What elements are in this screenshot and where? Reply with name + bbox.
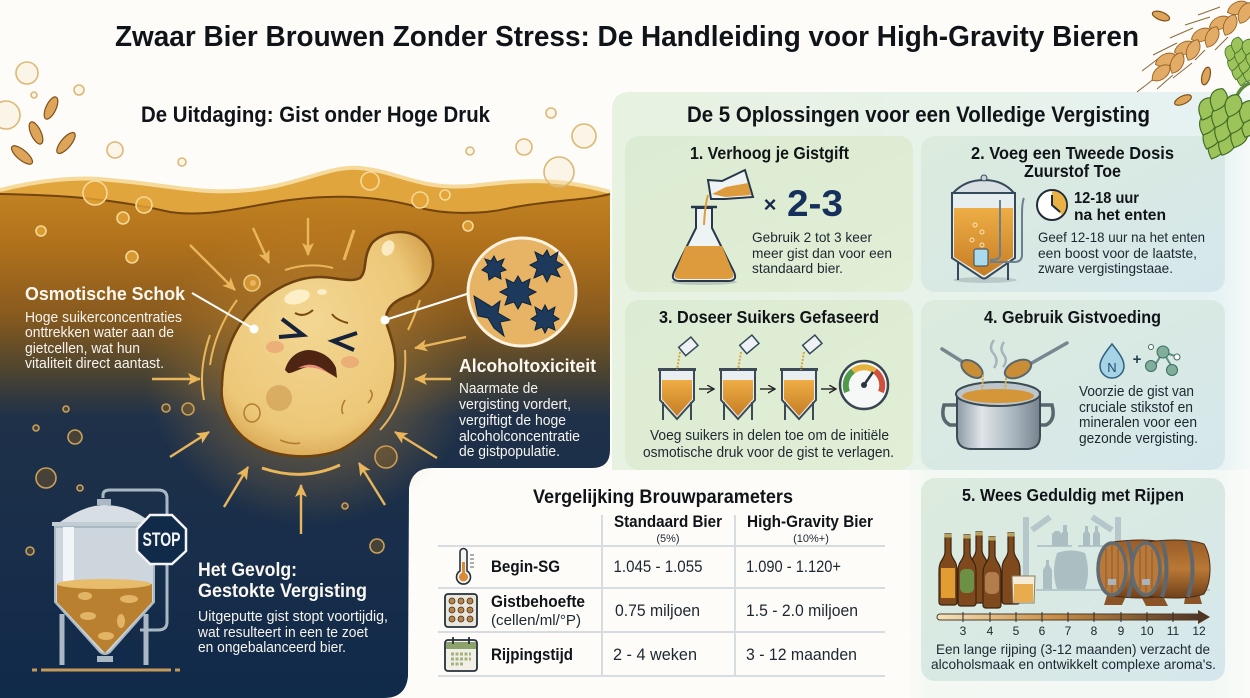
icon: three dosing tanks (658, 335, 835, 420)
card 3: suikers: Voeg suikers in delen toe om de initiële (650, 428, 889, 444)
timeline arrow (937, 610, 1210, 638)
text: osmotische schok (25, 283, 186, 372)
text: alcoholtoxiciteit: vergiftigt de hoge (459, 413, 566, 429)
card 4: gistvoeding: 4. Gebruik Gistvoeding (984, 307, 1161, 327)
card 2: zuurstof: 12-18 uur (1074, 190, 1139, 207)
row: rijpingstijd: Rijpingstijd (491, 646, 573, 664)
text: osmotische schok: Osmotische Schok (25, 283, 186, 304)
icon: barrels (1098, 540, 1210, 606)
text: het gevolg: Gestokte Vergisting (198, 580, 367, 602)
stop sign (137, 515, 186, 564)
timeline arrow: 12 (1192, 624, 1206, 638)
card 3: suikers: 3. Doseer Suikers Gefaseerd (659, 307, 879, 327)
text: alcoholtoxiciteit: Naarmate de (459, 381, 538, 397)
pressure arrows (152, 218, 466, 534)
text: alcoholtoxiciteit: de gistpopulatie. (459, 444, 560, 460)
comparison table (438, 486, 885, 676)
icon: oxygenated tank (952, 175, 1024, 283)
row: gistbehoefte: (cellen/ml/°P) (491, 613, 581, 629)
barley seeds (9, 95, 78, 167)
row: gistbehoefte: 0.75 miljoen (615, 602, 700, 620)
section heading: De Uitdaging: Gist onder Hoge Druk (141, 102, 491, 127)
table header: (10%+) (793, 533, 829, 545)
icon: well plate (445, 594, 477, 627)
timeline arrow: 4 (987, 624, 994, 638)
text: alcoholtoxiciteit (459, 355, 596, 460)
card 5: rijpen (921, 478, 1225, 681)
row: gistbehoefte (445, 593, 858, 629)
row: gistbehoefte: Gistbehoefte (491, 593, 585, 611)
card 1: gistgift: 2-3 (787, 183, 843, 224)
section heading: De 5 Oplossingen voor een Volledige Vergisting (687, 102, 1150, 127)
text: alcoholtoxiciteit: alcoholconcentratie (459, 429, 580, 445)
icon: calendar (445, 637, 477, 671)
bubbles (0, 62, 596, 555)
decoration: wheat ear (1137, 0, 1250, 92)
icon: pressure gauge (840, 361, 888, 409)
timeline arrow: 11 (1167, 624, 1180, 638)
text: osmotische schok: vitaliteit direct aantast. (25, 356, 164, 372)
timeline arrow: 10 (1140, 624, 1154, 638)
card 1: gistgift (625, 136, 913, 292)
comparison table: Vergelijking Brouwparameters (533, 486, 793, 508)
timeline arrow: 7 (1065, 624, 1072, 638)
row: rijpingstijd (445, 637, 857, 671)
panel background (612, 92, 1250, 698)
magnifier: alcohol toxicity (468, 238, 576, 346)
row: rijpingstijd: 3 - 12 maanden (746, 646, 857, 664)
panel: de uitdaging (0, 62, 610, 698)
card 4: gistvoeding: gezonde vergisting. (1079, 431, 1198, 447)
card 3: suikers: osmotische druk voor de gist te verlagen. (643, 445, 894, 461)
card 5: rijpen: alcoholsmaak en ontwikkelt complexe aroma's. (931, 656, 1216, 672)
timeline arrow: 9 (1118, 624, 1125, 638)
card 1: gistgift: × (764, 192, 776, 217)
icon: clock (1037, 190, 1067, 220)
callout lines (192, 293, 470, 334)
row: begin-sg: Begin-SG (491, 558, 560, 576)
decoration: falling grains (1151, 9, 1212, 107)
card 5: rijpen: Een lange rijping (3-12 maanden) verzacht de (936, 641, 1210, 657)
timeline arrow: 6 (1039, 624, 1046, 638)
card 2: zuurstof: Geef 12-18 uur na het enten (1038, 229, 1205, 245)
decoration: hop cones (1182, 35, 1250, 171)
stop sign: STOP (142, 530, 181, 551)
card 2: zuurstof (921, 136, 1225, 292)
glow behind yeast (145, 215, 475, 525)
icon: nitrogen and minerals: + (1133, 351, 1142, 368)
card 2: zuurstof: 2. Voeg een Tweede Dosis (971, 143, 1174, 163)
icon: pot and spoons (942, 340, 1067, 449)
icon: bottles and glass (939, 532, 1035, 608)
card 2: zuurstof: een boost voor de laatste, (1038, 245, 1197, 261)
icon: stalled fermenter (32, 490, 186, 670)
beer background (0, 168, 610, 698)
text: alcoholtoxiciteit: Alcoholtoxiciteit (459, 355, 596, 376)
icon: flask and pouring beaker (671, 170, 753, 285)
row: gistbehoefte: 1.5 - 2.0 miljoen (746, 602, 858, 620)
row: begin-sg: 1.045 - 1.055 (614, 558, 702, 576)
icon: nitrogen and minerals: N (1107, 360, 1117, 375)
timeline arrow: 3 (960, 624, 967, 638)
table header (614, 513, 874, 545)
icon: thermometer (456, 548, 474, 584)
text: het gevolg: Uitgeputte gist stopt voortijdig, (198, 609, 388, 625)
timeline arrow: 5 (1013, 624, 1020, 638)
card 2: zuurstof: na het enten (1074, 207, 1166, 224)
text: osmotische schok: Hoge suikerconcentraties (25, 310, 182, 326)
row: rijpingstijd: 2 - 4 weken (613, 646, 697, 664)
card 2: zuurstof: zware vergistingstaae. (1038, 260, 1173, 276)
card 3: suikers (625, 300, 913, 470)
card 2: zuurstof: Zuurstof Toe (1024, 161, 1121, 181)
card 5: rijpen: 5. Wees Geduldig met Rijpen (962, 485, 1184, 505)
card 1: gistgift: meer gist dan voor een (752, 245, 892, 261)
row: begin-sg (456, 548, 841, 584)
text: het gevolg: en ongebalanceerd bier. (198, 640, 346, 656)
timeline arrow: 8 (1091, 624, 1098, 638)
cellar background (1026, 517, 1210, 590)
text: het gevolg: Het Gevolg: (198, 559, 297, 581)
table header: High-Gravity Bier (747, 513, 874, 531)
text: alcoholtoxiciteit: vergisting vordert, (459, 397, 571, 413)
text: het gevolg: wat resulteert in een te zoet (197, 625, 368, 641)
card 1: gistgift: 1. Verhoog je Gistgift (690, 143, 849, 163)
card 4: gistvoeding: Voorzie de gist van (1079, 384, 1194, 400)
row: begin-sg: 1.090 - 1.120+ (746, 558, 841, 576)
card 4: gistvoeding: mineralen voor een (1079, 415, 1197, 431)
card 1: gistgift: standaard bier. (752, 260, 843, 276)
yeast face (266, 310, 359, 378)
text: osmotische schok: gietcellen, wat hun (25, 341, 140, 357)
yeast cell character (222, 232, 433, 456)
card 4: gistvoeding: cruciale stikstof en (1079, 400, 1193, 416)
text: osmotische schok: onttrekken water aan de (25, 325, 174, 341)
card 1: gistgift: Gebruik 2 tot 3 keer (752, 229, 872, 245)
text: het gevolg (197, 559, 388, 656)
panel: de 5 oplossingen (612, 92, 1250, 698)
title: Zwaar Bier Brouwen Zonder Stress: De Handleiding voor High-Gravity Bieren (115, 21, 1139, 53)
table header: Standaard Bier (614, 513, 723, 531)
table header: (5%) (656, 533, 680, 545)
icon: nitrogen and minerals (1100, 344, 1180, 378)
card 4: gistvoeding (921, 300, 1225, 470)
